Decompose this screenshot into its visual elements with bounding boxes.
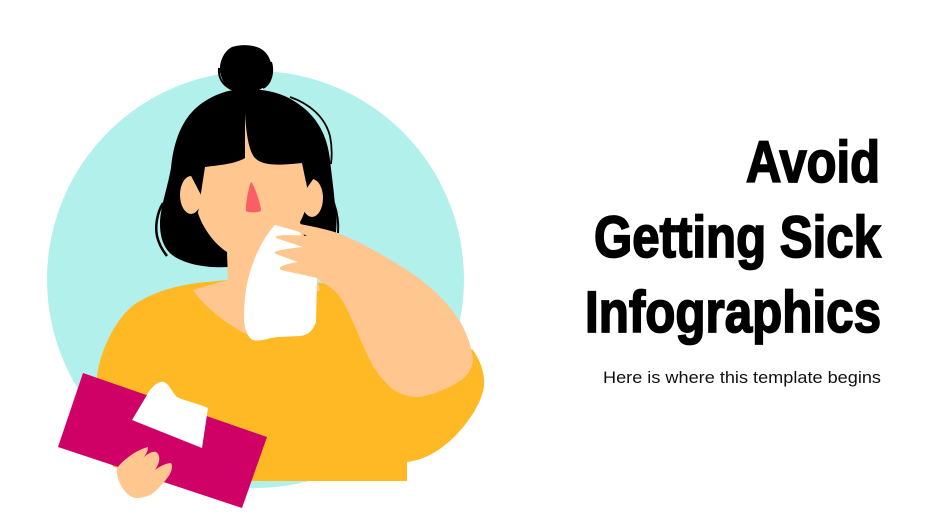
ears (180, 163, 323, 217)
tissue at face (244, 225, 317, 341)
hair (156, 89, 338, 267)
hair bun (219, 45, 272, 92)
face and neck (193, 113, 320, 335)
title: Getting Sick (594, 205, 882, 270)
title: Infographics (585, 280, 881, 345)
nose (246, 182, 261, 212)
background circle (47, 71, 464, 488)
tissue in box (132, 382, 208, 448)
shirt (97, 280, 484, 481)
illustration: woman blowing her nose (58, 45, 484, 508)
tissue box (58, 373, 267, 508)
title: Avoid (746, 130, 880, 195)
title (585, 130, 882, 345)
arm and hand (275, 224, 473, 397)
lower hand (117, 447, 172, 498)
subtitle: Here is where this template begins (603, 368, 881, 387)
